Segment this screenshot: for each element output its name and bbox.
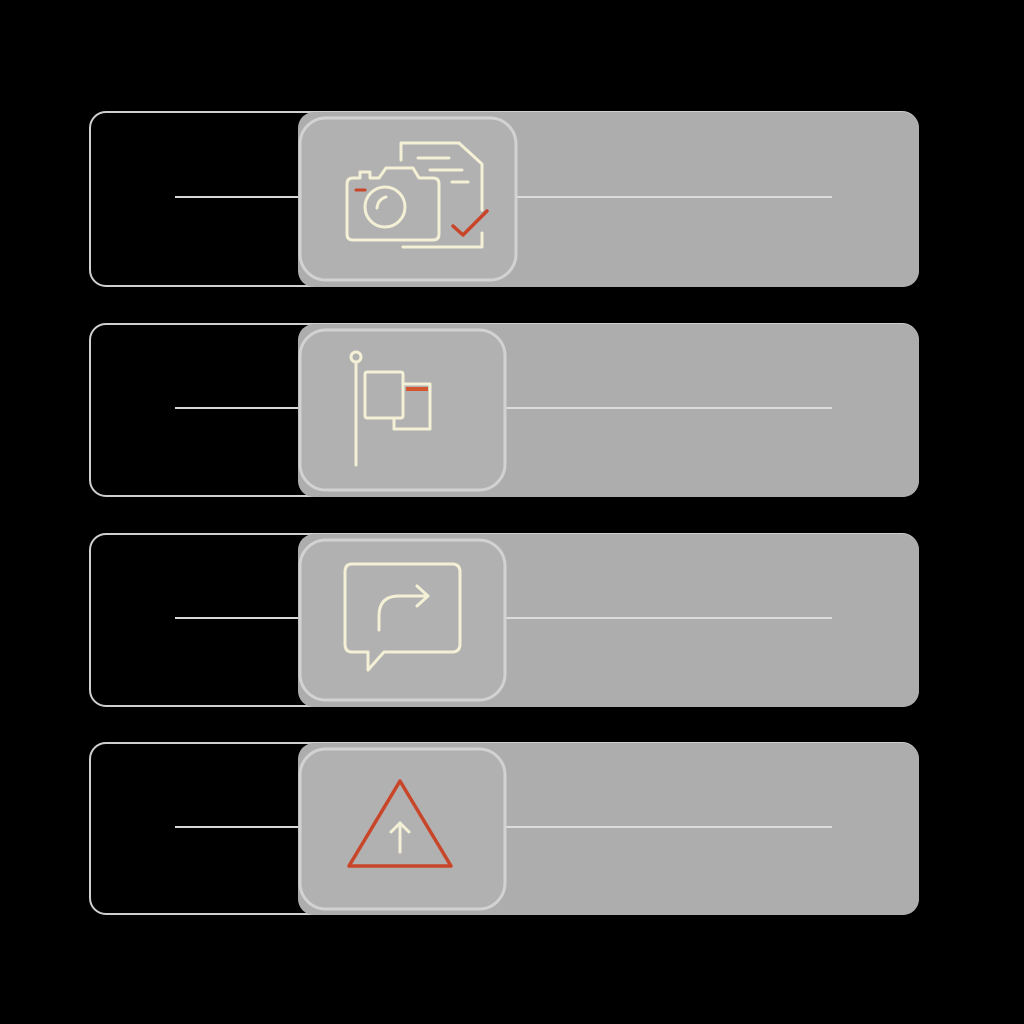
row 4: [90, 743, 919, 915]
icon box: flag: [300, 330, 505, 490]
icon box: speech bubble with arrow: [300, 540, 505, 700]
row 1: [90, 112, 919, 287]
icon box: camera document: [300, 118, 516, 280]
row 3: [90, 534, 919, 707]
icon box: warning triangle with up arrow: [300, 749, 505, 909]
row 2: [90, 324, 919, 497]
